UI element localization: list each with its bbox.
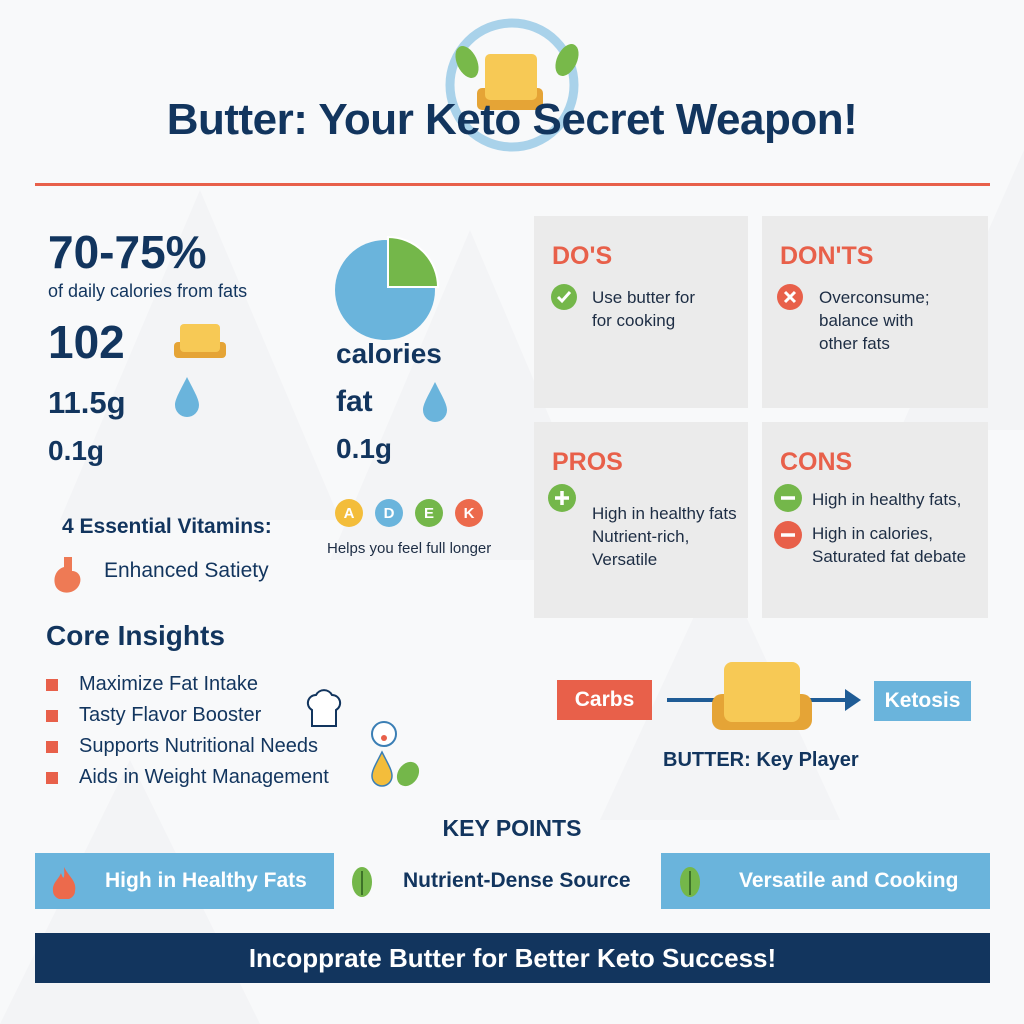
- stats block: of daily calories from fats: [48, 281, 247, 301]
- core insights: Supports Nutritional Needs: [79, 735, 318, 757]
- panel: PROS: Nutrient-rich,: [592, 527, 689, 546]
- panel: PROS: [534, 422, 748, 618]
- panel: DO'S: for cooking: [592, 311, 675, 330]
- stats block: Helps you feel full longer: [327, 540, 491, 557]
- icon: drop: [423, 382, 447, 422]
- stats block: 11.5g: [48, 385, 126, 420]
- flow diagram: carbs -> butter -> ketosis: Ketosis: [885, 689, 960, 712]
- panel: PROS: PROS: [552, 448, 623, 476]
- panel: CONS: Saturated fat debate: [812, 547, 966, 566]
- panel: PROS: Versatile: [592, 550, 657, 569]
- flow diagram: carbs -> butter -> ketosis: BUTTER: Key Player: [663, 749, 859, 771]
- panel: DON'TS: [762, 216, 988, 408]
- key points bar: Nutrient-Dense Source: [403, 869, 631, 892]
- icon: drop: [175, 377, 199, 417]
- flow diagram: carbs -> butter -> ketosis: Carbs: [575, 688, 634, 711]
- icon: butter: [174, 324, 226, 358]
- icon: stomach: [54, 557, 80, 593]
- core insights: [46, 620, 420, 788]
- stats block: 0.1g: [48, 435, 104, 466]
- key points bar: High in Healthy Fats: [105, 869, 307, 892]
- vitamins: 4 Essential Vitamins:: [62, 515, 272, 538]
- panel: CONS: High in calories,: [812, 524, 933, 543]
- core insights: Aids in Weight Management: [79, 766, 329, 788]
- panel: CONS: High in healthy fats,: [812, 490, 961, 509]
- stats block: fat: [336, 385, 373, 418]
- stats block: calories: [336, 338, 442, 369]
- icon: chef hat: [306, 689, 342, 727]
- panel: CONS: [762, 422, 988, 618]
- pie chart: [335, 238, 437, 340]
- stat 102: 102: [48, 316, 125, 368]
- bottom banner: Incopprate Butter for Better Keto Success!: [249, 943, 776, 973]
- vitamin badges: [335, 499, 483, 527]
- panel: DO'S: DO'S: [552, 242, 612, 270]
- bottom banner: [35, 933, 990, 983]
- vitamin badges: A: [344, 505, 355, 522]
- key points heading: KEY POINTS: [443, 815, 581, 841]
- panel: DON'TS: other fats: [819, 334, 890, 353]
- stats block: 0.1g: [336, 433, 392, 464]
- vitamin badges: D: [384, 505, 395, 522]
- title icon: ring with butter and leaves: [446, 18, 579, 152]
- panel: DO'S: [534, 216, 748, 408]
- panel: DON'TS: DON'TS: [780, 242, 873, 270]
- stat 70-75%: 70-75%: [48, 226, 207, 278]
- icon: butter: [712, 662, 812, 730]
- icon: gauge drop leaf: [371, 721, 420, 787]
- title: Butter: Your Keto Secret Weapon!: [167, 95, 857, 144]
- vitamin badges: E: [424, 505, 434, 522]
- panel: PROS: High in healthy fats: [592, 504, 737, 523]
- core insights: Tasty Flavor Booster: [79, 704, 261, 726]
- core insights: Maximize Fat Intake: [79, 673, 258, 695]
- panel: DO'S: Use butter for: [592, 288, 695, 307]
- panel: DON'TS: Overconsume;: [819, 288, 930, 307]
- core insights: Core Insights: [46, 620, 225, 651]
- stats block: [48, 226, 491, 593]
- flow diagram: carbs -> butter -> ketosis: [557, 662, 971, 771]
- stats block: Enhanced Satiety: [104, 559, 269, 582]
- panel: DON'TS: balance with: [819, 311, 914, 330]
- vitamin badges: K: [464, 505, 475, 522]
- key points bar: [35, 853, 990, 909]
- panel: CONS: CONS: [780, 448, 852, 476]
- key points bar: Versatile and Cooking: [739, 869, 958, 892]
